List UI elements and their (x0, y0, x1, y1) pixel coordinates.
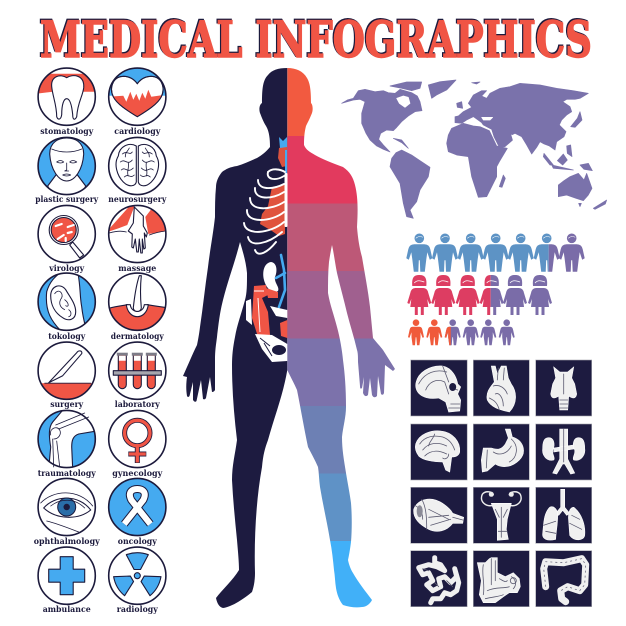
hudson bay (397, 96, 410, 107)
label: stomatology: stomatology (40, 127, 94, 137)
label: oncology: oncology (118, 537, 158, 547)
label: massage: massage (118, 264, 157, 274)
label: tokology: tokology (48, 332, 86, 342)
icon: surgery (37, 342, 97, 401)
label: traumatology: traumatology (38, 469, 97, 479)
south east asia islands (543, 145, 592, 171)
britain and japan (457, 102, 582, 127)
organ: intestines (246, 285, 287, 362)
madagascar (499, 175, 505, 187)
child 4 (463, 319, 479, 345)
label: cardiology: cardiology (114, 127, 161, 137)
man 1 (406, 234, 432, 272)
organ: lung (260, 184, 285, 236)
man 4 (483, 234, 509, 272)
tile: skull (411, 360, 467, 416)
label: surgery: surgery (50, 400, 84, 410)
label: ambulance: ambulance (43, 605, 91, 615)
child 5 (480, 319, 496, 345)
icon: massage (107, 204, 167, 263)
label: laboratory: laboratory (115, 400, 161, 410)
woman 5 (503, 275, 527, 315)
icon: oncology (109, 478, 166, 536)
tile: stomach (473, 424, 529, 480)
pictogram: children (408, 319, 515, 345)
label: ophthalmology: ophthalmology (34, 537, 101, 547)
woman 6 (528, 275, 552, 315)
icon: dermatology (107, 273, 167, 332)
icon: radiology (109, 547, 166, 604)
body right half: coloured bands (287, 60, 402, 611)
label: neurosurgery: neurosurgery (108, 195, 167, 205)
child 1 (408, 319, 424, 345)
black sea and gulf (482, 117, 517, 141)
icon: stomatology (37, 68, 97, 125)
icon: plastic surgery (38, 137, 95, 196)
icon: virology (38, 205, 95, 263)
woman 3 (456, 275, 480, 315)
south america (390, 150, 430, 218)
tile: kidneys (536, 424, 592, 480)
tile: eyeball (411, 487, 467, 543)
child 3, half filled (445, 319, 461, 345)
pictogram: women (407, 275, 552, 315)
tile: colon (536, 551, 592, 607)
organ: kidney (263, 262, 278, 292)
man 5 (508, 234, 534, 272)
australia and new zealand (558, 173, 607, 209)
world map (342, 80, 607, 218)
tile: thyroid (536, 360, 592, 416)
human body figure (183, 60, 402, 611)
eurasia (455, 83, 588, 154)
pictogram: men (406, 234, 585, 272)
child 6 (499, 319, 515, 345)
organ: blood vessels (276, 255, 285, 307)
panel: specialty icons (34, 67, 167, 615)
tile: brain (411, 424, 467, 480)
icon: gynecology (109, 410, 166, 468)
tile: ear (473, 551, 529, 607)
panel: organ tiles (411, 360, 592, 607)
tile: heart (473, 360, 529, 416)
man 7 (559, 234, 585, 272)
icon: laboratory (109, 342, 166, 399)
label: gynecology: gynecology (112, 469, 163, 479)
woman 1 (407, 275, 431, 315)
tile: uterus (473, 487, 529, 543)
woman 4, half filled (480, 275, 504, 315)
man 2 (432, 234, 458, 272)
skeleton: rib cage (244, 169, 288, 254)
man 3 (458, 234, 484, 272)
body left half: dark silhouette (183, 68, 287, 608)
icon: ambulance (38, 547, 95, 604)
icon: traumatology (38, 409, 97, 469)
man 6, half filled (534, 234, 560, 272)
woman 2 (431, 275, 455, 315)
organ: thyroid (278, 137, 287, 178)
africa (447, 123, 507, 197)
tile: lungs (536, 487, 592, 543)
icon: cardiology (107, 67, 167, 125)
child 2 (426, 319, 442, 345)
label: plastic surgery: plastic surgery (35, 195, 99, 205)
tile: small intestine (411, 551, 467, 607)
icon: ophthalmology (38, 478, 95, 536)
north america (342, 89, 422, 152)
icon: tokology (38, 272, 95, 332)
icon: neurosurgery (109, 137, 166, 195)
label: radiology: radiology (117, 605, 159, 615)
arctic islands and greenland (390, 80, 480, 148)
label: dermatology: dermatology (111, 332, 165, 342)
label: virology: virology (48, 264, 85, 274)
